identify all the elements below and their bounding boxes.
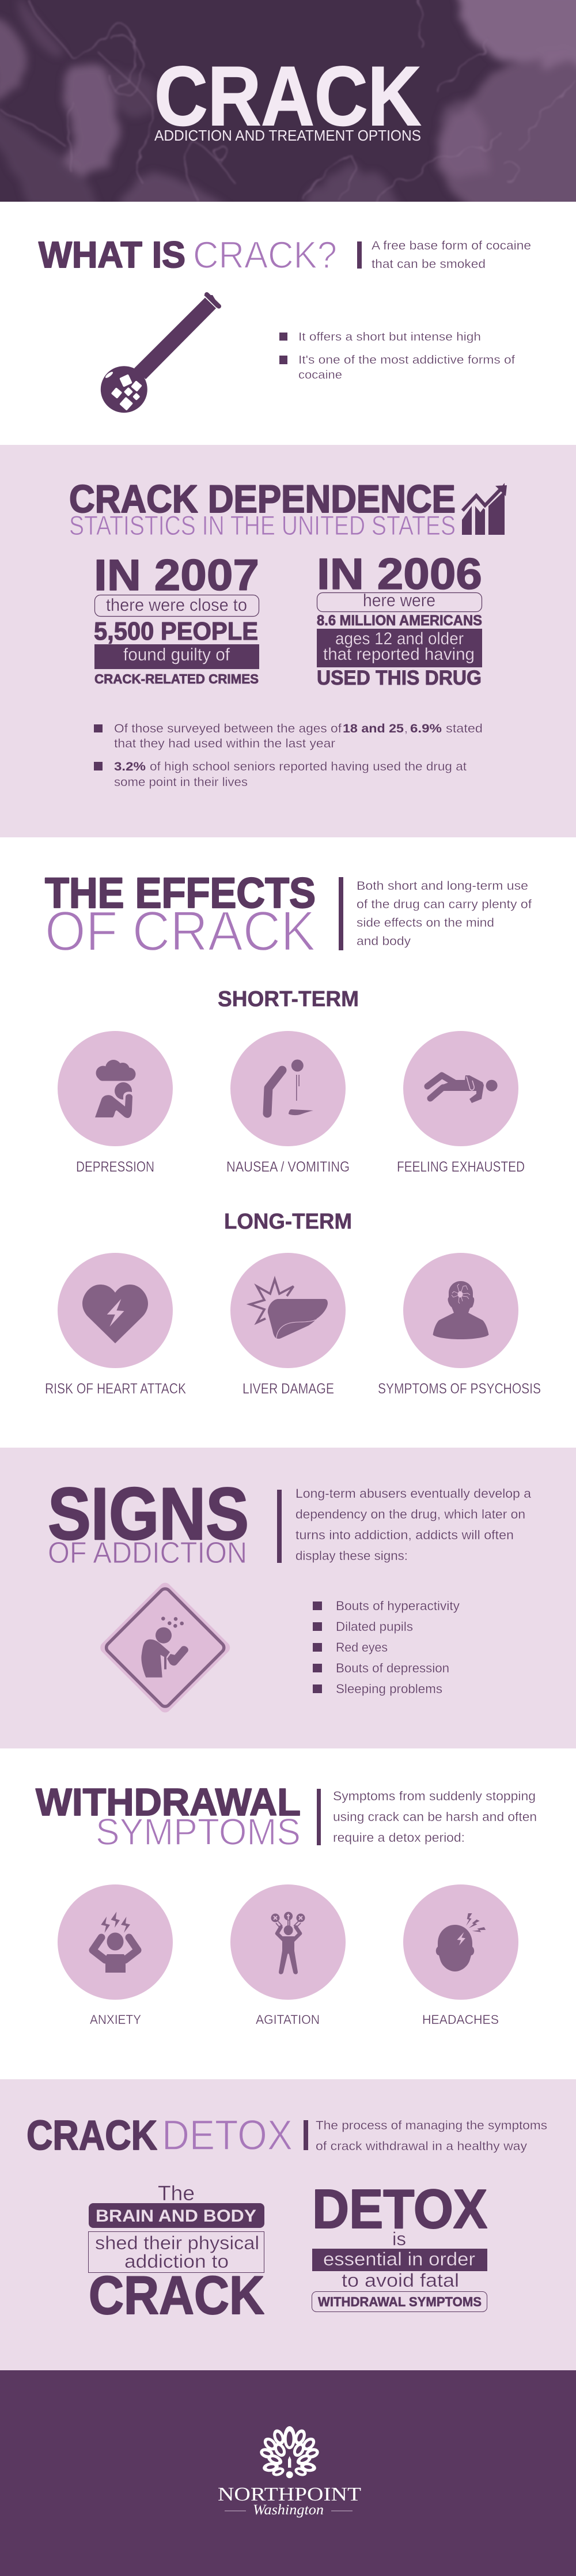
- heading: the effects of crack: OF CRACK: [45, 900, 316, 962]
- smoke background: [0, 0, 576, 213]
- intro text: [357, 879, 532, 948]
- effect labels: short-term: NAUSEA / VOMITING: [226, 1159, 350, 1175]
- signs list: [313, 1599, 460, 1696]
- callout: brain and body: CRACK: [89, 2265, 264, 2325]
- intro text: using crack can be harsh and often: [333, 1810, 537, 1824]
- bullet list: It's one of the most addictive forms of: [298, 354, 515, 367]
- heading: what is crack: WHAT IS: [39, 234, 185, 275]
- intro text: turns into addiction, addicts will often: [295, 1528, 514, 1542]
- intro text: [316, 2119, 547, 2153]
- icon: agitation: [230, 1884, 346, 2000]
- stat: 2007: found guilty of: [123, 644, 230, 664]
- icon: headaches: [403, 1884, 518, 2000]
- icon: warning diamond: [98, 1580, 232, 1715]
- intro text: [295, 1486, 532, 1563]
- intro text: of the drug can carry plenty of: [357, 898, 532, 911]
- icon: anxiety: [58, 1884, 173, 2000]
- callout: detox is essential: DETOX: [312, 2178, 487, 2240]
- signs list: Dilated pupils: [336, 1619, 413, 1634]
- effect labels: long-term: [45, 1381, 541, 1397]
- panel: signs of addiction: [0, 1448, 576, 1748]
- stat: 2007: [94, 551, 259, 686]
- title: CRACK: CRACK: [154, 49, 421, 143]
- bullet list: cocaine: [298, 369, 342, 382]
- intro text: Long-term abusers eventually develop a: [295, 1486, 532, 1501]
- intro text: Symptoms from suddenly stopping: [333, 1789, 536, 1803]
- logo: northpoint peacock: [259, 2426, 320, 2478]
- callout: detox is essential: is: [392, 2228, 406, 2249]
- panel: crack dependence statistics: [0, 445, 576, 837]
- heading: crack detox: CRACK: [26, 2113, 157, 2159]
- effect labels: long-term: SYMPTOMS OF PSYCHOSIS: [378, 1381, 541, 1397]
- stat: 2006: USED THIS DRUG: [317, 667, 482, 689]
- heading: withdrawal symptoms: SYMPTOMS: [96, 1811, 301, 1853]
- effect labels: short-term: DEPRESSION: [76, 1159, 154, 1175]
- heading: withdrawal symptoms: [36, 1781, 301, 1853]
- stat: 2007: there were close to: [106, 595, 247, 615]
- intro text: display these signs:: [295, 1548, 408, 1563]
- stat: 2006: here were: [363, 590, 435, 610]
- effect labels: short-term: FEELING EXHAUSTED: [397, 1159, 525, 1175]
- stat: 2007: 5,500 PEOPLE: [94, 617, 258, 645]
- intro text: dependency on the drug, which later on: [295, 1507, 525, 1521]
- signs list: Sleeping problems: [336, 1682, 442, 1696]
- panel: withdrawal symptoms: [36, 1781, 537, 2027]
- bullet: 18 to 25 survey: [94, 722, 483, 750]
- stat: 2007: CRACK-RELATED CRIMES: [94, 671, 259, 686]
- bullet: high school seniors: 3.2%: [114, 760, 146, 773]
- intro text: of crack withdrawal in a healthy way: [316, 2140, 528, 2153]
- heading: crack detox: [26, 2112, 293, 2159]
- stat: 2007: IN 2007: [94, 551, 259, 600]
- stat: 2006: that reported having: [323, 645, 475, 664]
- stat: 2006: 8.6 MILLION AMERICANS: [317, 613, 482, 629]
- heading: crack dependence: [69, 477, 456, 541]
- icon: nausea and vomiting: [230, 1031, 346, 1146]
- intro text: [333, 1789, 537, 1845]
- heading: what is crack: [39, 233, 337, 276]
- logo tagline: Washington: [253, 2502, 324, 2518]
- signs list: Bouts of depression: [336, 1661, 449, 1675]
- stat: 2006: ages 12 and older: [335, 629, 464, 648]
- logo wordmark: NORTHPOINT: [218, 2484, 361, 2505]
- callout: brain and body: The: [158, 2181, 195, 2205]
- heading: signs of addiction: SIGNS: [48, 1473, 249, 1555]
- effect labels: short-term: [76, 1159, 525, 1175]
- bullet: high school seniors: some point in their lives: [114, 776, 248, 789]
- stat: 2006: [317, 550, 482, 689]
- intro text: The process of managing the symptoms: [316, 2119, 547, 2132]
- intro text: side effects on the mind: [357, 916, 494, 930]
- effect labels: long-term: RISK OF HEART ATTACK: [45, 1381, 186, 1397]
- panel: hero banner: [0, 0, 576, 213]
- withdrawal labels: ANXIETY: [90, 2012, 141, 2027]
- callout: brain and body: BRAIN AND BODY: [96, 2207, 256, 2226]
- callout: detox is essential: WITHDRAWAL SYMPTOMS: [318, 2294, 482, 2309]
- callout: brain and body: shed their physical: [95, 2233, 259, 2253]
- effect labels: long-term: LIVER DAMAGE: [242, 1381, 334, 1397]
- bullet: high school seniors: [94, 760, 467, 789]
- bullet: 18 to 25 survey: that they had used within the last year: [114, 737, 335, 750]
- bullet: 18 to 25 survey: stated: [446, 722, 483, 735]
- intro text: require a detox period:: [333, 1830, 465, 1845]
- heading: signs of addiction: OF ADDICTION: [48, 1536, 247, 1570]
- heading: what is crack: CRACK?: [193, 233, 337, 276]
- heading: crack detox: DETOX: [162, 2112, 293, 2159]
- intro text: that can be smoked: [372, 258, 486, 271]
- icon: symptoms of psychosis: [403, 1253, 518, 1368]
- heading: crack dependence: CRACK DEPENDENCE: [69, 477, 456, 521]
- subtitle: ADDICTION AND TREATMENT OPTIONS: [154, 127, 421, 144]
- callout: detox is essential: essential in order: [323, 2249, 475, 2269]
- icon: crack pipe: [101, 294, 219, 413]
- signs list: Bouts of hyperactivity: [336, 1599, 460, 1613]
- bullet: 18 to 25 survey: 6.9%: [410, 722, 442, 735]
- panel: effects of crack: [45, 869, 541, 1397]
- signs list: Red eyes: [336, 1640, 388, 1655]
- withdrawal labels: AGITATION: [256, 2012, 320, 2027]
- bullet list: [279, 331, 515, 382]
- panel: what is crack: [39, 233, 531, 413]
- intro text: Both short and long-term use: [357, 879, 528, 893]
- intro text: and body: [357, 935, 411, 948]
- bullet: high school seniors: of high school seniors reported having used the drug at: [150, 760, 467, 773]
- heading: the effects of crack: [45, 869, 316, 962]
- bullet: 18 to 25 survey: 18 and 25: [343, 722, 404, 735]
- intro text: [372, 239, 531, 271]
- stat: 2006: IN 2006: [317, 550, 482, 599]
- icon: depression: [58, 1031, 173, 1146]
- icon: liver damage: [230, 1253, 346, 1368]
- bullet: 18 to 25 survey: ,: [404, 722, 408, 735]
- intro text: A free base form of cocaine: [372, 239, 531, 252]
- heading: long-term: LONG-TERM: [224, 1210, 352, 1234]
- heading: withdrawal symptoms: WITHDRAWAL: [36, 1781, 301, 1824]
- panel: crack detox: [0, 2079, 576, 2370]
- icon: rising bar chart: [462, 483, 507, 535]
- heading: crack dependence: STATISTICS IN THE UNITED STATES: [69, 510, 456, 541]
- bullet: 18 to 25 survey: Of those surveyed between the ages of: [114, 722, 342, 735]
- callout: detox is essential: [312, 2178, 487, 2312]
- withdrawal labels: HEADACHES: [422, 2012, 499, 2027]
- icon: feeling exhausted: [403, 1031, 518, 1146]
- heading: the effects of crack: THE EFFECTS: [45, 869, 316, 917]
- callout: detox is essential: to avoid fatal: [342, 2270, 459, 2291]
- icon: heart attack: [58, 1253, 173, 1368]
- callout: brain and body: addiction to: [124, 2251, 229, 2272]
- bullet list: It offers a short but intense high: [298, 331, 481, 343]
- withdrawal labels: [90, 2012, 499, 2027]
- panel: footer: [0, 2370, 576, 2576]
- callout: brain and body: [89, 2181, 264, 2325]
- heading: short-term: SHORT-TERM: [218, 987, 359, 1011]
